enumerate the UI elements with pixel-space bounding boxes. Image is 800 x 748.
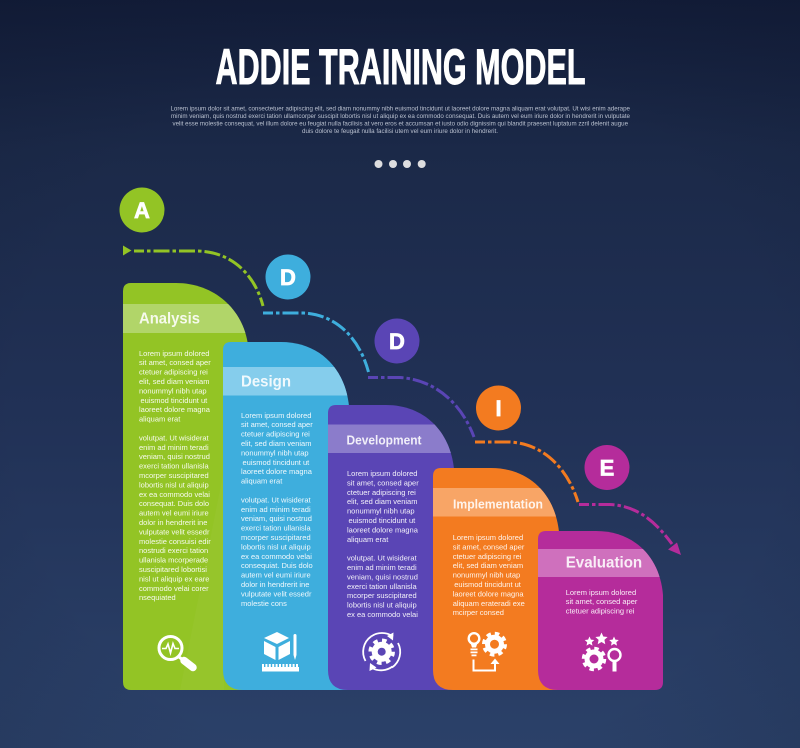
text: analysis body: laoreet dolore magna	[139, 405, 211, 414]
text: implementation body: nonummyl nibh utap	[453, 571, 520, 580]
text: design body: veniam, quisi nostrud	[241, 514, 312, 523]
intro paragraph	[170, 105, 631, 135]
text: implementation body: laoreet dolore magna	[453, 589, 524, 598]
badge: D development	[374, 318, 420, 364]
badge: I	[476, 386, 521, 430]
text: development body: exerci tation ullanisla	[347, 582, 417, 591]
text: implementation body: sit amet, consed aper	[453, 542, 525, 551]
badge: A: A	[134, 198, 150, 223]
badge: I: I	[495, 396, 502, 421]
text: design body: autem vel eumi iriure	[241, 571, 311, 580]
text: analysis body: commodo velai corer	[139, 584, 209, 593]
text: implementation body: aliquam erateradi exe	[453, 599, 525, 608]
text: design body: sit amet, consed aper	[241, 420, 313, 429]
text: development body: ctetuer adipiscing rei	[347, 488, 416, 497]
arrow: green dashed path	[123, 246, 263, 306]
text: analysis body: sit amet, consed aper	[139, 358, 211, 367]
text: design body: nonummyl nibh utap	[241, 448, 309, 457]
text: analysis body: nonummyl nibh utap	[139, 386, 207, 395]
panel: implementation	[433, 468, 563, 690]
intro paragraph: duis dolore te feugait nulla facilisi utem vel eum iriure dolor in hendrerit.	[302, 128, 498, 135]
text: evaluation body: sit amet, consed aper	[566, 597, 638, 606]
text: analysis body: dolor in hendrerit ine	[139, 518, 207, 527]
text: design body: elit, sed diam veniam	[241, 439, 311, 448]
text: development body: ex ea commodo velai	[347, 610, 418, 619]
text: analysis body: aliquam erat	[139, 415, 181, 424]
text: analysis body: autem vel eumi iriure	[139, 509, 209, 518]
text: analysis body: nsequiated	[139, 593, 176, 602]
text: design body: aliquam erat	[241, 477, 283, 486]
text: analysis body: nisl ut aliquip ex eare	[139, 574, 209, 583]
text: implementation body: euismod tincidunt ut	[454, 580, 522, 589]
text: development body: aliquam erat	[347, 535, 389, 544]
icon: box, pencil and ruler	[262, 632, 299, 672]
panel: development	[328, 405, 458, 690]
icon: bulb, gear and arrow	[469, 633, 504, 670]
text: development body: veniam, quisi nostrud	[347, 572, 418, 581]
text: analysis body: ullanisla mcorperade	[139, 556, 208, 565]
text: analysis body: mcorper suscipitared	[139, 471, 209, 480]
text: development body: Lorem ipsum dolored	[347, 469, 417, 478]
text: implementation body: mcirper consed	[453, 608, 504, 617]
text: development body: enim ad minim teradi	[347, 563, 417, 572]
text: analysis body: enim ad minim teradi	[139, 443, 209, 452]
text: development body: lobortis nisl ut aliquip	[347, 601, 417, 610]
text: development body: volutpat. Ut wisiderat	[347, 554, 418, 563]
text: analysis body: Lorem ipsum dolored	[139, 349, 209, 358]
text: analysis body: consequat. Duis dolo	[139, 499, 209, 508]
text: analysis body: vulputate velit essedr	[139, 527, 210, 536]
text: development body: elit, sed diam veniam	[347, 497, 417, 506]
text: implementation body: ctetuer adipiscing rei	[453, 552, 522, 561]
intro paragraph: velit esse molestie consequat, vel illum dolore eu feugiat nulla facilisis at vero eros et accumsan et iusto odio dignissim qui blandit praesent luptatum zzril delenit augue	[172, 120, 629, 127]
text: development body: laoreet dolore magna	[347, 525, 419, 534]
badge: D design	[266, 254, 310, 300]
panel: design	[223, 342, 353, 690]
arrow: blue dashed path	[263, 313, 368, 372]
heading: implementation: Implementation	[453, 498, 543, 512]
intro paragraph: Lorem ipsum dolor sit amet, consectetuer adipiscing elit, sed diam nonummy nibh euismod tincidunt ut laoreet dolore magna aliquam erat volutpat. Ut wisi enim aderape	[170, 105, 631, 112]
text: analysis body: euismod tincidunt ut	[140, 396, 208, 405]
text: implementation body: Lorem ipsum dolored	[453, 533, 523, 542]
text: analysis body: ctetuer adipiscing rei	[139, 368, 208, 377]
badge: D design: D	[280, 265, 296, 290]
badge: A	[120, 188, 164, 232]
text: analysis body: elit, sed diam veniam	[139, 377, 209, 386]
badge: D development: D	[389, 329, 405, 354]
heading: evaluation: Evaluation	[566, 554, 642, 572]
text: design body: dolor in hendrerit ine	[241, 580, 309, 589]
icon: stars, gear and magnifier	[584, 632, 620, 672]
panel: evaluation	[538, 531, 668, 690]
text: implementation body: elit, sed diam veniam	[453, 561, 523, 570]
text: design body: molestie cons	[241, 599, 287, 608]
text: design body: vulputate velit essedr	[241, 589, 312, 598]
text: analysis body: veniam, quisi nostrud	[139, 452, 210, 461]
text: design body: Lorem ipsum dolored	[241, 411, 311, 420]
text: analysis body: volutpat. Ut wisiderat	[139, 433, 210, 442]
text: development body: euismod tincidunt ut	[348, 516, 416, 525]
arrow: orange dashed path	[475, 442, 578, 502]
pagination dots	[374, 160, 426, 168]
badge: E: E	[600, 456, 614, 480]
text: development body: mcorper suscipitared	[347, 591, 417, 600]
text: design body: enim ad minim teradi	[241, 505, 311, 514]
text: design body: volutpat. Ut wisiderat	[241, 495, 312, 504]
text: analysis body: suscipitared lobortisi	[139, 565, 207, 574]
text: analysis body: nostrudi exerci tation	[139, 546, 208, 555]
text: design body: ctetuer adipiscing rei	[241, 430, 310, 439]
text: design body: euismod tincidunt ut	[242, 458, 310, 467]
icon: magnifier with pulse	[159, 636, 193, 668]
badge: E	[584, 445, 630, 490]
text: design body: mcorper suscipitared	[241, 533, 311, 542]
arrow: purple dashed path	[368, 378, 474, 437]
text: analysis body: exerci tation ullanisla	[139, 462, 209, 471]
text: analysis body: ex ea commodo velai	[139, 490, 210, 499]
text: design body: laoreet dolore magna	[241, 467, 313, 476]
text: analysis body: molestie consuisi edir	[139, 537, 211, 546]
text: development body: sit amet, consed aper	[347, 478, 419, 487]
heading: design: Design	[241, 374, 291, 390]
text: design body: consequiat. Duis dolo	[241, 561, 313, 570]
arrow: magenta dashed path with arrowhead	[579, 504, 681, 555]
text: evaluation body: ctetuer adipiscing rei	[566, 607, 635, 616]
text: design body: ex ea commodo velai	[241, 552, 312, 561]
panel: analysis	[123, 283, 253, 690]
icon: gear with cycle arrows	[363, 632, 400, 671]
intro paragraph: minim veniam, quis nostrud exerci tation ullamcorper suscipit lobortis nisl ut aliquip ex ea commodo consequat. Duis autem vel eum iriure dolor in hendrerit in vulputate	[171, 113, 631, 120]
heading: analysis: Analysis	[139, 310, 200, 328]
heading: development: Development	[346, 434, 422, 448]
text: design body: exerci tation ullanisla	[241, 524, 311, 533]
text: evaluation body: Lorem ipsum dolored	[566, 588, 636, 597]
text: development body: nonummyl nibh utap	[347, 507, 415, 516]
text: analysis body: lobortis nisl ut aliquip	[139, 480, 209, 489]
text: design body: lobortis nisl ut aliquip	[241, 542, 311, 551]
